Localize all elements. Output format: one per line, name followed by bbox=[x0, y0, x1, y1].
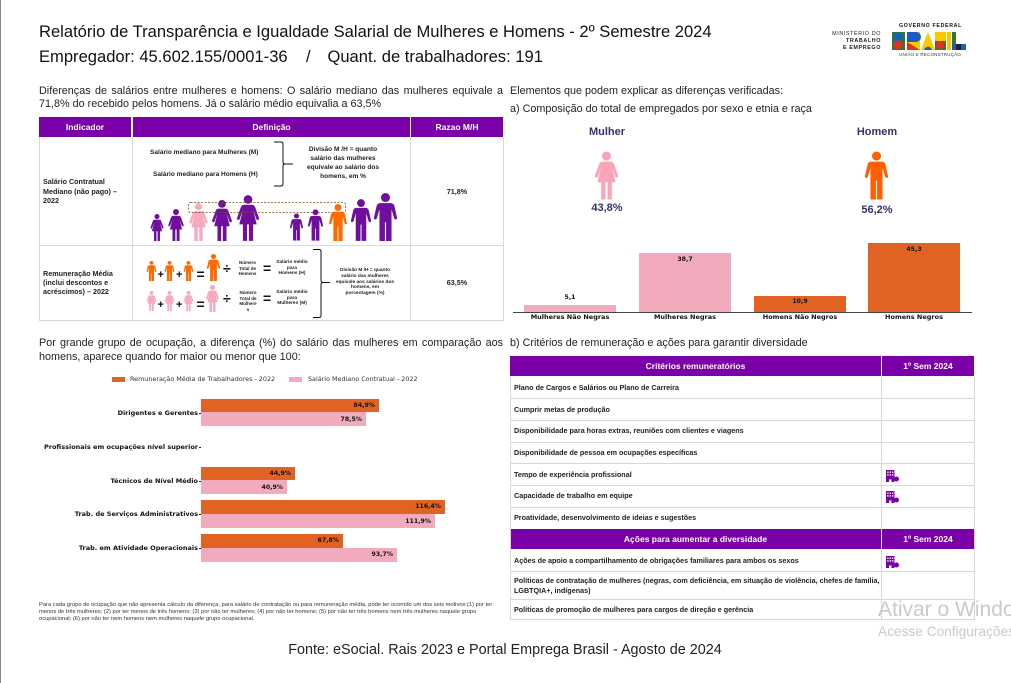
formula text: total homens bbox=[238, 260, 256, 276]
row label: salário contratual: 2022 bbox=[43, 196, 59, 205]
logo: governo federal brasil bbox=[892, 23, 966, 57]
definition: divisão M/H porcentagem: homens, em bbox=[351, 285, 379, 290]
bar chart: composição: 10,9 bbox=[792, 298, 808, 305]
table text: critérios: Políticas de promoção de mulheres para cargos de direção e gerência bbox=[514, 605, 753, 614]
formula: homens: ÷ bbox=[223, 260, 231, 276]
formula: homens bbox=[146, 254, 231, 282]
icon: empresa bbox=[886, 556, 899, 568]
icon: empresa bbox=[886, 491, 899, 503]
title: Relatório de Transparência e Igualdade Salarial de Mulheres e Homens - 2º Semestre 2024 bbox=[39, 22, 712, 41]
formula: homens: = bbox=[196, 266, 205, 282]
formula: mulheres: + bbox=[158, 299, 164, 311]
bar: mulheres negras bbox=[639, 253, 731, 312]
bar chart: ocupações: 93,7% bbox=[372, 551, 393, 558]
panel: tabela de indicadores bbox=[39, 117, 504, 321]
title bbox=[39, 22, 712, 66]
definition: divisão M/H: Divisão M /H = quanto bbox=[309, 146, 377, 153]
logo: ministério do trabalho e emprego bbox=[832, 30, 881, 51]
formula text: total mulheres: s bbox=[247, 307, 249, 312]
formula: homens: + bbox=[158, 269, 164, 281]
value: 56,2%: 56,2% bbox=[861, 204, 893, 216]
formula text: médio mulheres: Mulheres (M) bbox=[277, 301, 307, 306]
logo: governo federal brasil: UNIÃO E RECONSTRUÇÃO bbox=[899, 52, 961, 57]
fonte: Fonte: eSocial. Rais 2023 e Portal Emprega Brasil - Agosto de 2024 bbox=[288, 642, 722, 658]
row label: remuneração média bbox=[43, 269, 113, 296]
formula: mulheres: + bbox=[176, 299, 182, 311]
formula text: médio homens: Homens (H) bbox=[279, 271, 305, 276]
formula text: total mulheres: Mulhere bbox=[239, 301, 257, 306]
definition: divisão M/H porcentagem: Divisão M /H = quanto bbox=[340, 268, 390, 273]
definition: divisão M/H porcentagem: porcentagem (%) bbox=[346, 291, 384, 296]
footnote bbox=[39, 602, 492, 622]
logo: governo federal brasil: GOVERNO FEDERAL bbox=[899, 23, 962, 29]
legend bbox=[112, 375, 418, 383]
bar chart: composição: 5,1 bbox=[565, 294, 575, 301]
dashed median band bbox=[188, 202, 346, 213]
formula text: médio homens bbox=[276, 260, 308, 276]
table text: critérios: Disponibilidade de pessoa em ocupações específicas bbox=[514, 448, 697, 457]
legend: Salário Mediano Contratual - 2022 bbox=[308, 375, 418, 383]
formula text: total homens: Número bbox=[239, 260, 256, 265]
formula: mulheres: ÷ bbox=[223, 290, 231, 306]
value: 71,8%: 71,8% bbox=[447, 187, 467, 196]
watermark: ativar o windows: Acesse Configurações bbox=[878, 624, 1011, 639]
row label: salário contratual bbox=[43, 177, 117, 205]
table header: indicador: Indicador bbox=[66, 122, 104, 132]
bar chart: ocupações: 116,4% bbox=[415, 503, 441, 510]
bar chart: ocupações: 40,9% bbox=[262, 484, 283, 491]
text: grupo de ocupação: Por grande grupo de ocupação, a diferença (%) do salário das mulheres em comparação aos homens, aparece quando for maior ou menor que 100: bbox=[39, 337, 503, 363]
table header: indicador bbox=[39, 117, 131, 137]
table header: razão bbox=[411, 117, 503, 137]
bar: homens não negros bbox=[754, 296, 846, 312]
formula text: médio homens: para bbox=[287, 266, 297, 271]
icon: mulher bbox=[595, 152, 618, 200]
formula symbol equals: = bbox=[263, 290, 271, 306]
brace bbox=[274, 142, 293, 186]
bar chart: composição: Homens Não Negros bbox=[763, 313, 837, 321]
row label: remuneração média: acréscimos) – 2022 bbox=[43, 287, 109, 296]
panel: critérios table: Critérios remuneratórios bbox=[646, 361, 745, 371]
formula text: médio mulheres: para bbox=[287, 296, 297, 301]
legend: Remuneração Média de Trabalhadores - 2022 bbox=[130, 375, 275, 383]
label: mulher: Mulher bbox=[589, 126, 625, 138]
table text: critérios: Disponibilidade para horas extras, reuniões com clientes e viagens bbox=[514, 426, 744, 435]
bar chart: ocupações: Trab. em Atividade Operacionais bbox=[79, 544, 198, 552]
formula: homens: + bbox=[176, 269, 182, 281]
panel: critérios table: 1º Sem 2024 bbox=[903, 361, 953, 371]
table text: critérios: Políticas de contratação de mulheres (negras, com deficiência, em situação de violência, chefes de família, bbox=[514, 576, 880, 585]
bar chart: ocupações: 44,9% bbox=[270, 470, 291, 477]
formula: mulheres: = bbox=[196, 296, 205, 312]
row label: salário contratual: Mediano (não pago) – bbox=[43, 186, 117, 196]
definition: divisão M/H: equivale ao salário dos bbox=[307, 164, 379, 171]
formula text: médio homens: Salário médio bbox=[276, 260, 308, 265]
value: 43,8%: 43,8% bbox=[591, 202, 623, 214]
bar chart: composição: 45,3 bbox=[906, 246, 922, 253]
formula text: total homens: Total de bbox=[239, 266, 256, 271]
definition: salário mediano homens: Salário mediano para Homens (H) bbox=[153, 171, 258, 178]
formula text: total mulheres: Total de bbox=[240, 296, 256, 301]
table text: critérios: Proatividade, desenvolvimento de ideias e sugestões bbox=[514, 513, 696, 522]
formula: mulheres bbox=[146, 285, 231, 312]
bar chart: ocupações bbox=[44, 399, 445, 562]
bar: mulheres não negras bbox=[524, 305, 616, 312]
bar chart: ocupações: Técnicos de Nível Médio bbox=[110, 477, 198, 485]
heading: composição: a) Composição do total de empregados por sexo e etnia e raça bbox=[510, 103, 812, 115]
logo: ministério do trabalho e emprego: MINISTÉRIO DO bbox=[832, 30, 881, 36]
bar chart: ocupações: Trab. de Serviços Administrativos bbox=[75, 510, 198, 518]
definition: divisão M/H bbox=[307, 146, 379, 180]
definition: divisão M/H: salário das mulheres bbox=[310, 155, 376, 162]
bar chart: composição: Mulheres Não Negras bbox=[531, 313, 609, 321]
watermark: ativar o windows bbox=[878, 598, 1011, 639]
heading: critérios: b) Critérios de remuneração e ações para garantir diversidade bbox=[510, 337, 808, 349]
bar: homens negros bbox=[868, 243, 960, 312]
formula text: total homens: Homens bbox=[239, 271, 256, 276]
table header: razão: Razao M/H bbox=[436, 122, 478, 132]
title: Empregador: 45.602.155/0001-36 / Quant. de trabalhadores: 191 bbox=[39, 47, 543, 66]
formula text: total mulheres bbox=[239, 290, 257, 312]
label: homem: Homem bbox=[857, 126, 897, 138]
bar chart: composição bbox=[513, 243, 972, 321]
table text: critérios: Capacidade de trabalho em equipe bbox=[514, 491, 633, 500]
figures: mulheres em fila bbox=[150, 195, 259, 241]
bar chart: ocupações: 84,9% bbox=[354, 402, 375, 409]
bar chart: composição: Mulheres Negras bbox=[654, 313, 716, 321]
definition: divisão M/H: homens, em % bbox=[320, 173, 366, 180]
panel: critérios table: 1º Sem 2024 bbox=[903, 534, 953, 544]
table header: definição bbox=[133, 117, 410, 137]
left edge line bbox=[0, 0, 1, 683]
panel: critérios table: Ações para aumentar a diversidade bbox=[624, 534, 767, 544]
logo: ministério do trabalho e emprego: E EMPREGO bbox=[843, 45, 881, 51]
table header: definição: Definição bbox=[252, 122, 291, 132]
definition: divisão M/H porcentagem: salário das mulheres bbox=[341, 274, 389, 279]
definition: divisão M/H porcentagem bbox=[336, 268, 394, 296]
row label: remuneração média: (inclui descontos e bbox=[43, 278, 108, 287]
figures: homens em fila bbox=[290, 193, 397, 241]
table text: critérios: Cumprir metas de produção bbox=[514, 405, 610, 414]
bar chart: ocupações: 111,9% bbox=[405, 518, 431, 525]
formula text: total mulheres: Número bbox=[239, 290, 256, 295]
bar chart: ocupações: 67,8% bbox=[318, 537, 339, 544]
logo: ministério do trabalho e emprego: TRABALHO bbox=[846, 38, 881, 44]
bar chart: ocupações: 78,5% bbox=[341, 416, 362, 423]
table text: critérios: Tempo de experiência profissional bbox=[514, 470, 632, 479]
formula text: médio mulheres bbox=[276, 290, 308, 306]
footnote: menos de três mulheres; (2) por ter menos de três homens; (3) por não ter mulheres; (4) por não ter homens; (5) por não ter três homens nem três mulheres naquele grupo bbox=[39, 609, 476, 615]
brace bbox=[313, 249, 330, 318]
definition: salário mediano mulheres: Salário mediano para Mulheres (M) bbox=[150, 149, 258, 156]
definition: divisão M/H porcentagem: equivale aos salários dos bbox=[336, 280, 394, 285]
footnote: Para cada grupo de ocupação que não apresenta cálculo da diferença, para salário de contratação ou para remuneração média, pode ter ocorrido um dos seis motivos:(1) por ter bbox=[39, 602, 492, 608]
formula text: médio mulheres: Salário médio bbox=[276, 290, 308, 295]
intro text: diferenças de salários: Diferenças de salários entre mulheres e homens: O salário mediano das mulheres equivale a bbox=[39, 85, 503, 97]
table text: critérios: Ações de apoio a compartilhamento de obrigações familiares para ambos os sexos bbox=[514, 556, 799, 565]
panel: critérios table bbox=[510, 356, 975, 620]
icon: empresa bbox=[886, 470, 899, 482]
table text: critérios bbox=[514, 383, 880, 614]
bar chart: ocupações: Profissionais em ocupações nível superior bbox=[44, 443, 198, 451]
intro text: diferenças de salários: 71,8% do recebido pelos homens. Já o salário médio equivalia a 63,5% bbox=[39, 98, 381, 110]
bar chart: ocupações: Dirigentes e Gerentes bbox=[118, 409, 198, 417]
bar chart: composição: 38,7 bbox=[677, 256, 693, 263]
table text: critérios: Plano de Cargos e Salários ou Plano de Carreira bbox=[514, 383, 679, 392]
footnote: ocupacional; (6) por não ter nem homens nem mulheres naquele grupo ocupacional. bbox=[39, 616, 254, 622]
table text: critérios: LGBTQIA+, indígenas) bbox=[514, 586, 590, 594]
row label: remuneração média: Remuneração Média bbox=[43, 269, 113, 278]
bar chart: composição: Homens Negros bbox=[885, 313, 943, 321]
row label: salário contratual: Salário Contratual bbox=[43, 177, 105, 186]
value: 63,5%: 63,5% bbox=[447, 278, 467, 287]
formula symbol equals: = bbox=[263, 260, 271, 276]
heading: elementos: Elementos que podem explicar as diferenças verificadas: bbox=[510, 85, 783, 97]
icon: homem bbox=[865, 152, 888, 200]
intro text: diferenças de salários bbox=[39, 85, 503, 110]
